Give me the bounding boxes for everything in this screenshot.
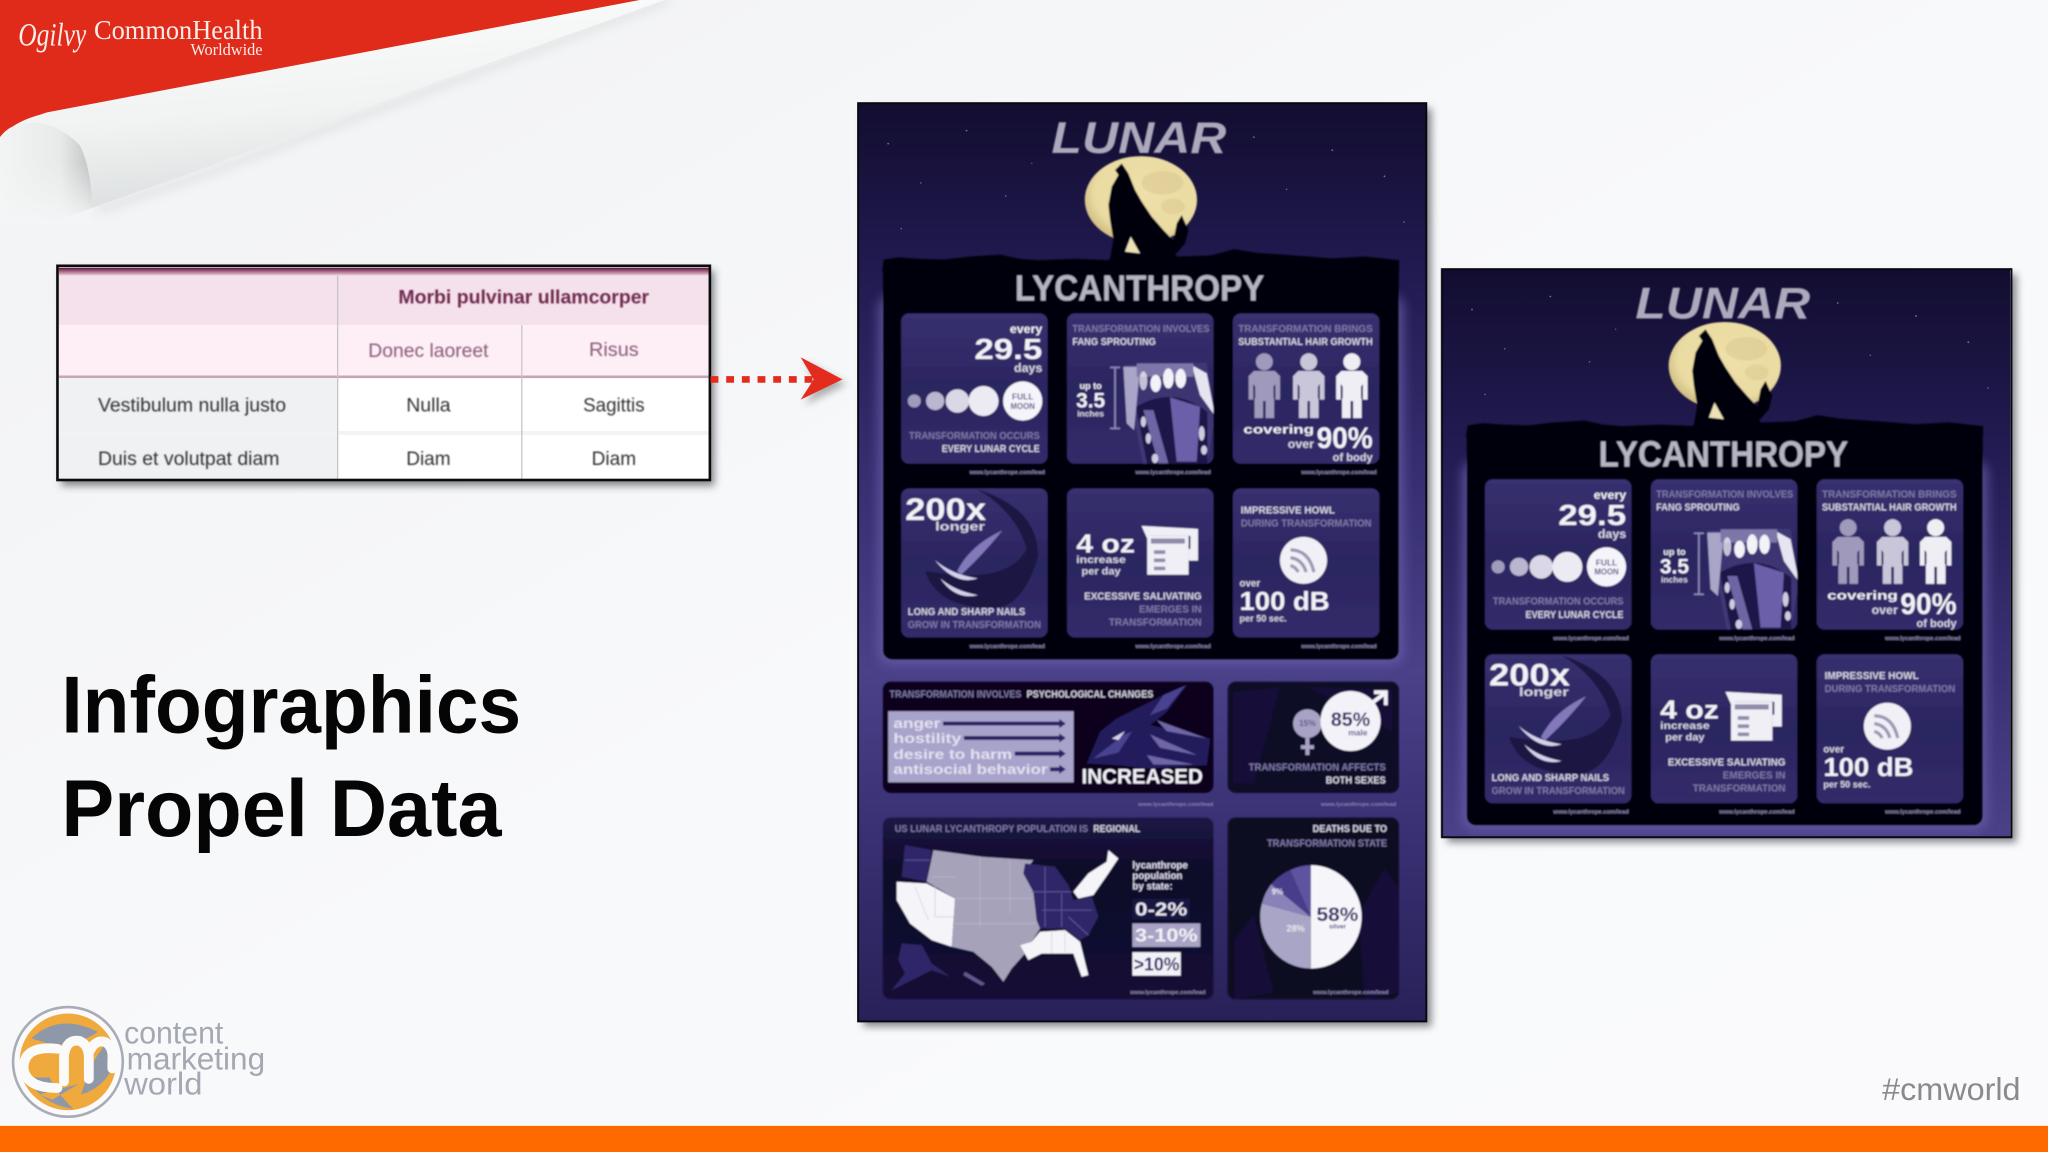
panel: US population map: REGIONAL — [1093, 824, 1140, 835]
card: hair growth: 90% — [1317, 422, 1373, 455]
copy: card nails: 200x — [1489, 658, 1571, 693]
card: fang sprouting: FANG SPROUTING — [1072, 337, 1156, 348]
list of increased behaviours with arrows: antisocial behavior — [893, 762, 1048, 777]
card: salivating — [1067, 488, 1213, 637]
copy: card lunar cycle — [1485, 479, 1631, 630]
logo: Ogilvy CommonHealth Worldwide: CommonHealth — [94, 15, 263, 45]
table text: Donec laoreet — [368, 341, 489, 362]
copy: card nails: GROW IN TRANSFORMATION — [1492, 786, 1625, 797]
footnote: www.lycanthrope.com/lead — [1320, 802, 1397, 808]
table text: Duis et volutpat diam — [98, 449, 280, 470]
map legend: lycanthrope — [1132, 861, 1188, 872]
card: nails: longer — [935, 520, 985, 533]
card: lunar cycle: TRANSFORMATION OCCURS — [909, 431, 1040, 442]
map legend: 3-10% — [1135, 925, 1198, 946]
card: howl: IMPRESSIVE HOWL — [1241, 505, 1335, 516]
logo: content marketing world: world — [123, 1067, 202, 1102]
panel: deaths pie chart: DEATHS DUE TO — [1313, 824, 1387, 835]
pie — [1260, 865, 1362, 969]
list of increased behaviours with arrows — [888, 711, 1074, 782]
logo: content marketing world: marketing — [127, 1042, 265, 1077]
card: howl: 100 dB — [1240, 586, 1330, 616]
map legend — [1132, 861, 1200, 976]
card: fang sprouting — [1067, 313, 1215, 466]
panel: US population map: www.lycanthrope.com/lead — [1129, 990, 1206, 996]
card: salivating: EXCESSIVE SALIVATING — [1084, 592, 1202, 603]
card: nails: GROW IN TRANSFORMATION — [908, 620, 1041, 631]
panel: psychological changes: INCREASED — [1081, 766, 1203, 789]
copy: card nails: LONG AND SHARP NAILS — [1492, 773, 1610, 784]
table text — [98, 288, 650, 470]
copy: card hair growth: over — [1872, 603, 1898, 617]
copy: title Lycanthropy: LYCANTHROPY — [1599, 433, 1848, 474]
infographic: cropped copy of poster top — [1442, 269, 2017, 842]
card: lunar cycle: days — [1014, 361, 1042, 375]
footnote: www.lycanthrope.com/lead — [969, 470, 1045, 476]
panel: deaths pie chart: silver — [1329, 924, 1346, 931]
card: howl: over — [1240, 578, 1260, 589]
table text: Morbi pulvinar ullamcorper — [398, 288, 650, 309]
card: fang sprouting: inches — [1077, 409, 1104, 419]
panel: US population map — [883, 818, 1213, 999]
card: howl — [1233, 488, 1379, 637]
copy: card howl: DURING TRANSFORMATION — [1825, 684, 1955, 695]
copy: footnote: www.lycanthrope.com/lead — [1718, 810, 1795, 816]
copy: footnote: www.lycanthrope.com/lead — [1552, 636, 1629, 642]
arrow: table to infographic — [711, 357, 846, 405]
card: howl: per 50 sec. — [1240, 614, 1287, 624]
copy: card hair growth: 90% — [1900, 588, 1957, 621]
copy: card nails: longer — [1519, 686, 1569, 699]
table text: Risus — [589, 340, 639, 361]
card: howl: DURING TRANSFORMATION — [1241, 518, 1371, 529]
card: hair growth: covering — [1243, 423, 1314, 437]
card: salivating: TRANSFORMATION — [1109, 618, 1202, 629]
copy: card lunar cycle: TRANSFORMATION OCCURS — [1493, 597, 1624, 608]
footnote: www.lycanthrope.com/lead — [1134, 470, 1211, 476]
table text: Diam — [406, 449, 451, 470]
copy: card hair growth: TRANSFORMATION BRINGS — [1822, 490, 1957, 501]
card: hair growth: TRANSFORMATION BRINGS — [1238, 324, 1373, 335]
copy: card howl: IMPRESSIVE HOWL — [1825, 671, 1919, 682]
copy: card howl: over — [1823, 744, 1844, 755]
panel: US population map: US LUNAR LYCANTHROPY POPULATION IS — [895, 824, 1088, 835]
copy: card lunar cycle: days — [1598, 527, 1626, 541]
table text: Nulla — [406, 395, 451, 416]
card: lunar cycle: EVERY LUNAR CYCLE — [942, 444, 1040, 455]
copy: card salivating: 4 oz — [1660, 694, 1719, 724]
map legend: >10% — [1134, 953, 1179, 974]
card: fang sprouting: 3.5 — [1076, 390, 1106, 413]
card: lunar cycle: MOON — [1011, 402, 1035, 411]
US map — [892, 845, 1118, 990]
copy: card salivating: per day — [1665, 733, 1705, 744]
card: fang sprouting: TRANSFORMATION INVOLVES — [1072, 324, 1210, 335]
panel: deaths pie chart: www.lycanthrope.com/lead — [1312, 990, 1389, 996]
panel: psychological changes: PSYCHOLOGICAL CHANGES — [1027, 689, 1154, 700]
poster title: Lycanthropy: LYCANTHROPY — [1015, 267, 1264, 308]
footnote: www.lycanthrope.com/lead — [1137, 802, 1214, 808]
copy: card lunar cycle: every — [1594, 488, 1626, 502]
panel: male and female split: TRANSFORMATION AFFECTS — [1249, 763, 1386, 774]
copy: card lunar cycle: 29.5 — [1558, 500, 1626, 532]
table text: Sagittis — [583, 395, 645, 416]
copy: card salivating: EXCESSIVE SALIVATING — [1668, 757, 1785, 768]
panel: psychological changes — [883, 682, 1213, 793]
panel: male and female split: male — [1348, 727, 1368, 737]
panel: deaths pie chart: 28% — [1287, 923, 1305, 933]
copy: moon and wolf — [1669, 322, 1781, 431]
red page corner with curl — [0, 0, 669, 225]
wolf creature art — [1087, 684, 1210, 768]
card: nails: 200x — [905, 492, 987, 527]
card: salivating: per day — [1081, 567, 1121, 578]
footnote: www.lycanthrope.com/lead — [1300, 470, 1377, 476]
copy: card hair growth: covering — [1827, 589, 1898, 603]
table text: Diam — [592, 449, 636, 470]
card: salivating: increase — [1076, 555, 1126, 566]
panel: male and female split: 85% — [1331, 709, 1370, 731]
card: nails: LONG AND SHARP NAILS — [908, 607, 1026, 618]
copy: card howl: 100 dB — [1823, 752, 1913, 782]
list of increased behaviours with arrows: hostility — [893, 731, 962, 746]
hashtag: #cmworld — [1882, 1072, 2021, 1107]
copy: card lunar cycle: EVERY LUNAR CYCLE — [1526, 610, 1624, 621]
logo: Ogilvy CommonHealth Worldwide — [18, 15, 263, 59]
card: salivating: EMERGES IN — [1139, 605, 1202, 616]
panel: psychological changes: TRANSFORMATION INVOLVES — [889, 689, 1022, 700]
main black panel — [878, 249, 1404, 665]
map legend: population — [1132, 871, 1182, 882]
panel: deaths pie chart — [1228, 818, 1399, 999]
heading: Propel Data — [61, 764, 502, 854]
copy: card fang sprouting: TRANSFORMATION INVOLVES — [1656, 490, 1794, 501]
copy: card fang sprouting: 3.5 — [1660, 555, 1689, 578]
footnote: www.lycanthrope.com/lead — [969, 644, 1045, 650]
copy: card lunar cycle: FULL — [1596, 558, 1617, 568]
map legend: 0-2% — [1135, 899, 1187, 920]
copy: card salivating: TRANSFORMATION — [1693, 784, 1785, 795]
panel: deaths pie chart: TRANSFORMATION STATE — [1267, 838, 1388, 849]
card: lunar cycle: 29.5 — [974, 334, 1042, 366]
copy: black panel — [1462, 415, 1988, 831]
card: lunar cycle — [901, 313, 1048, 464]
logo: content marketing world — [13, 1007, 265, 1117]
heading — [61, 661, 521, 854]
copy: card salivating: EMERGES IN — [1723, 770, 1785, 781]
map legend: by state: — [1132, 881, 1173, 892]
table — [57, 266, 714, 486]
card: lunar cycle: every — [1010, 322, 1042, 336]
heading: Infographics — [61, 661, 521, 751]
copy: card hair growth — [1817, 479, 1963, 630]
copy: card nails — [1485, 654, 1631, 803]
footnote: www.lycanthrope.com/lead — [1134, 644, 1211, 650]
panel: male and female split: BOTH SEXES — [1326, 776, 1386, 787]
copy: card fang sprouting: inches — [1661, 575, 1688, 585]
logo: Ogilvy CommonHealth Worldwide: Worldwide — [190, 40, 263, 59]
logo: Ogilvy CommonHealth Worldwide: Ogilvy — [18, 18, 87, 54]
copy: footnote: www.lycanthrope.com/lead — [1552, 810, 1629, 816]
card: lunar cycle: FULL — [1012, 392, 1034, 402]
copy: card hair growth: of body — [1917, 618, 1957, 630]
panel: deaths pie chart: 58% — [1317, 904, 1358, 926]
panel: male and female split — [1228, 682, 1399, 793]
card: hair growth: of body — [1333, 452, 1374, 464]
copy: card fang sprouting: FANG SPROUTING — [1656, 503, 1740, 514]
panel: deaths pie chart: 9% — [1272, 888, 1283, 897]
moon and howling wolf — [1085, 156, 1197, 265]
card: hair growth — [1233, 313, 1379, 464]
panel: male and female split: 15% — [1299, 718, 1316, 728]
infographic: full poster — [858, 103, 1432, 1027]
card: salivating: 4 oz — [1076, 528, 1135, 558]
orange footer bar — [0, 1126, 2048, 1152]
copy: card salivating: increase — [1660, 721, 1710, 732]
copy: card howl — [1817, 654, 1963, 803]
copy: card salivating — [1651, 654, 1797, 803]
poster title: Lunar: LUNAR — [1051, 114, 1226, 163]
copy: card howl: per 50 sec. — [1823, 780, 1871, 790]
copy: card fang sprouting: up to — [1663, 547, 1686, 557]
copy: card lunar cycle: MOON — [1594, 568, 1619, 577]
list of increased behaviours with arrows: desire to harm — [893, 747, 1012, 762]
footnote: www.lycanthrope.com/lead — [1300, 644, 1377, 650]
card: fang sprouting: up to — [1079, 381, 1102, 391]
copy: card hair growth: SUBSTANTIAL HAIR GROWTH — [1822, 503, 1957, 514]
card: hair growth: over — [1288, 437, 1314, 451]
list of increased behaviours with arrows: anger — [893, 716, 941, 731]
copy: footnote: www.lycanthrope.com/lead — [1718, 636, 1795, 642]
copy: card fang sprouting — [1651, 479, 1799, 632]
card: hair growth: SUBSTANTIAL HAIR GROWTH — [1238, 337, 1373, 348]
copy: footnote: www.lycanthrope.com/lead — [1884, 636, 1961, 642]
logo: content marketing world: content — [124, 1016, 224, 1051]
copy: title Lunar: LUNAR — [1635, 280, 1810, 329]
card: nails — [901, 488, 1048, 637]
table text: Vestibulum nulla justo — [98, 395, 286, 416]
copy: footnote: www.lycanthrope.com/lead — [1884, 810, 1961, 816]
